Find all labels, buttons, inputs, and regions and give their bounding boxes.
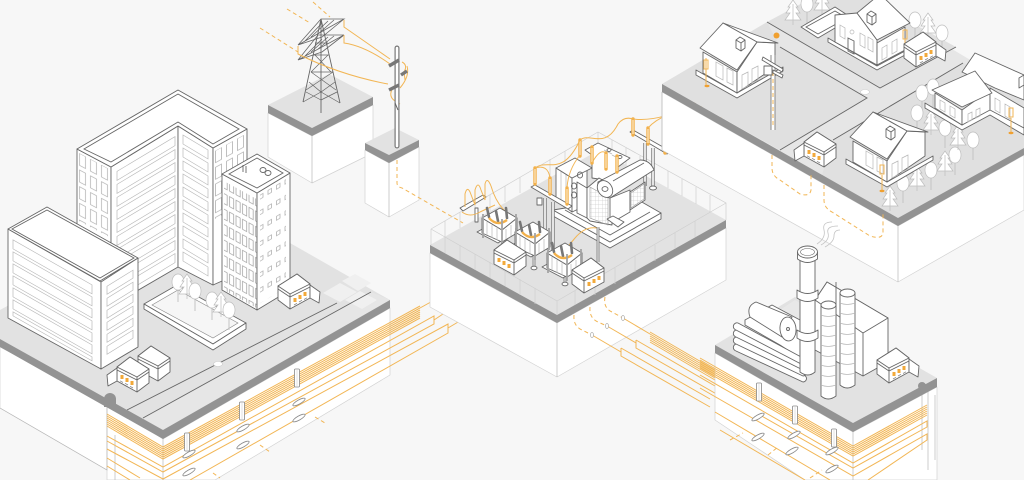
house: lower	[846, 112, 933, 187]
smokestack: front	[821, 301, 836, 399]
transformer radiators and core	[556, 143, 654, 227]
pipe stack	[733, 323, 807, 382]
posts with feet	[531, 227, 598, 286]
orange meter: L-shaped house	[1008, 108, 1014, 134]
panel: city block	[0, 200, 390, 480]
orange meter: upper house	[903, 30, 907, 50]
utility box: substation right	[572, 258, 604, 293]
orange meter: lower house	[880, 165, 884, 192]
utility box: substation left	[494, 240, 526, 275]
house: L-shaped right	[925, 53, 1024, 135]
cable clips: factory block	[751, 383, 839, 474]
small transformer: rear	[477, 208, 517, 246]
smoke	[817, 222, 840, 247]
cable bundles: city block	[107, 293, 480, 480]
cable clips: city block	[182, 369, 306, 477]
utility box: front left	[107, 357, 149, 392]
panel: factory block	[715, 297, 937, 480]
dashed service cables	[772, 155, 883, 237]
icon: pylon	[298, 19, 344, 113]
high-voltage wires to houses	[462, 60, 780, 250]
factory hall	[780, 282, 888, 376]
post: rear gantry	[645, 143, 656, 190]
icon: utility pole	[389, 48, 407, 146]
cable bundles: factory block	[700, 358, 927, 480]
utility box: rear left	[138, 346, 170, 381]
cylinder tank	[749, 302, 797, 342]
swimming pool	[801, 7, 852, 38]
cable markers: substation to factory	[590, 316, 624, 338]
utility box: by tower	[278, 274, 320, 309]
dashed and solid cables: substation to factory	[574, 297, 720, 407]
trees: residential	[785, 0, 979, 211]
panel: substation block	[430, 150, 726, 377]
dashed wires: pole to substation	[397, 160, 463, 223]
road and crosswalk markings	[127, 274, 377, 418]
overhead wires	[260, 2, 408, 104]
house: roadside	[696, 23, 783, 98]
dashed cables: city to substation	[213, 278, 503, 478]
insulators: transformer top	[580, 140, 617, 172]
gantry: small left	[460, 195, 486, 222]
utility box: upper house	[904, 32, 946, 67]
utility box: residential road	[794, 132, 836, 167]
gantry: rear right beam	[630, 119, 670, 154]
small transformer: front	[542, 243, 582, 281]
building: front slab	[8, 207, 138, 369]
smokestack: tall	[797, 246, 818, 375]
orange connection dot	[774, 32, 780, 38]
house: upper	[828, 0, 910, 70]
cable markers	[446, 290, 482, 312]
panel: high-voltage tower block	[268, 74, 373, 183]
panel: utility pole block	[365, 128, 419, 217]
transformer platform	[553, 197, 661, 248]
icon: street pole with transformer	[762, 55, 783, 130]
building: tower with windows	[222, 154, 290, 310]
fence: substation	[431, 132, 726, 315]
dashed cables: factory front	[730, 433, 822, 478]
building: L-shaped tower	[77, 90, 247, 306]
gantry: front	[531, 168, 572, 252]
small transformer: middle	[510, 222, 550, 260]
cylinder tank supports	[745, 305, 800, 358]
panel: residential block	[662, 0, 1024, 282]
utility box: factory	[877, 348, 919, 383]
smokestack: rear	[840, 289, 855, 388]
orange meter: house 1	[704, 58, 710, 87]
park with trees	[144, 274, 246, 350]
